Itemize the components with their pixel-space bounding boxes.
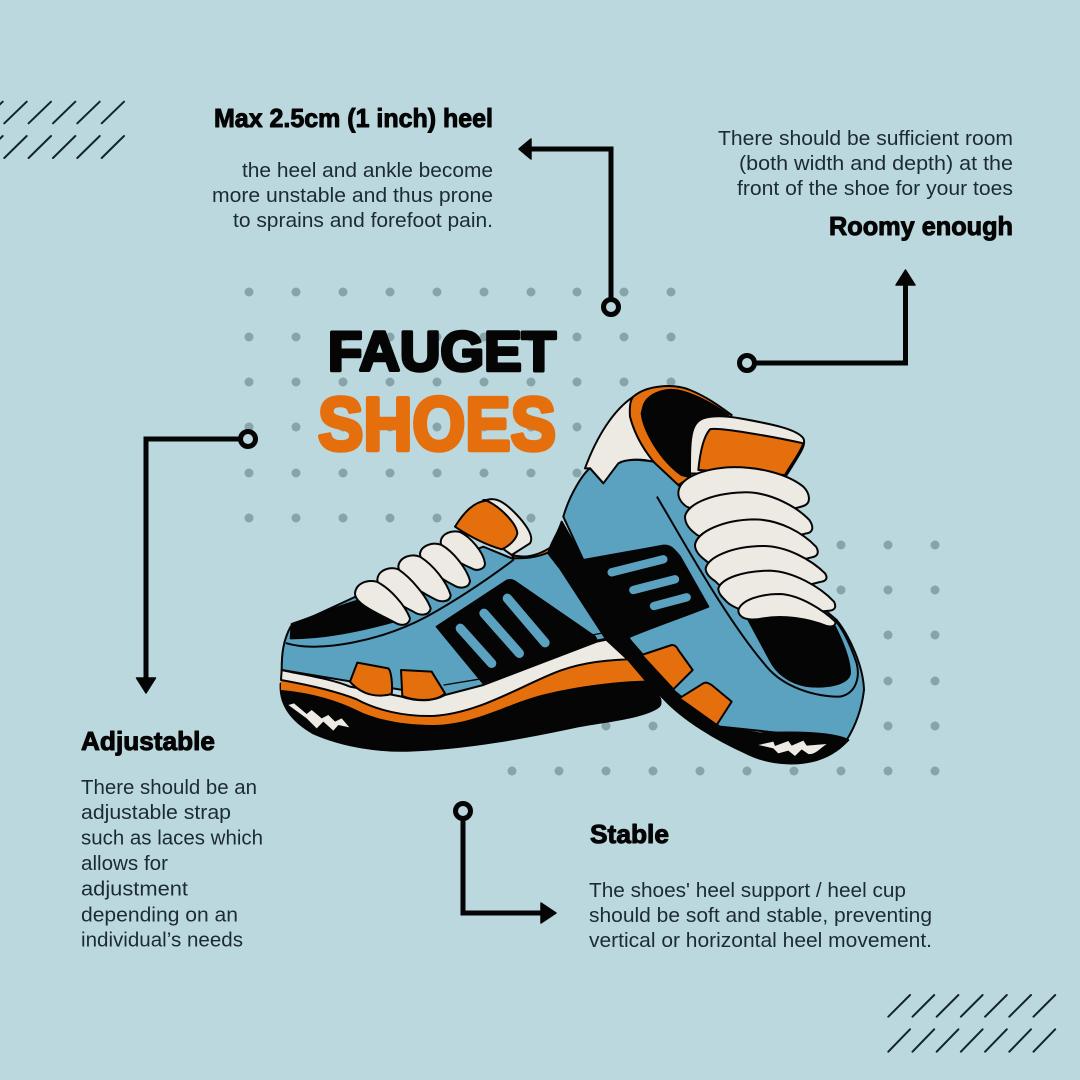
text block: roomy enough: Roomy enough: [829, 211, 1013, 241]
text block: heel: Max 2.5cm (1 inch) heel: [214, 103, 493, 133]
text block: roomy enough: (both width and depth) at the: [739, 153, 1013, 175]
text block: roomy enough: front of the shoe for your toes: [737, 178, 1013, 200]
text block: stable: The shoes' heel support / heel cup: [589, 880, 906, 902]
hatch pattern: bottom right: [888, 995, 1055, 1052]
hatch pattern: top left: [0, 102, 124, 158]
text block: stable: vertical or horizontal heel movement.: [589, 930, 932, 952]
text block: adjustable: depending on an: [81, 904, 238, 926]
text block: adjustable: Adjustable: [81, 726, 215, 756]
text block: heel: more unstable and thus prone: [212, 185, 493, 207]
text block: stable: should be soft and stable, preventing: [589, 905, 932, 927]
arrow: roomy: [740, 270, 915, 370]
text block: adjustable: such as laces which: [81, 828, 263, 850]
text block: heel: [212, 103, 493, 232]
text block: heel: to sprains and forefoot pain.: [233, 210, 493, 232]
text block: roomy enough: There should be sufficient room: [718, 128, 1013, 150]
text block: adjustable: [81, 726, 263, 952]
dot grid: lower: [508, 540, 940, 776]
title: [318, 320, 556, 466]
text block: stable: [589, 819, 932, 952]
text block: adjustable: There should be an: [81, 777, 257, 799]
text block: roomy enough: [718, 128, 1013, 241]
text block: heel: the heel and ankle become: [242, 160, 493, 182]
illustration: left shoe: [281, 499, 661, 751]
dot grid: upper: [244, 288, 676, 522]
text block: adjustable: adjustment: [81, 878, 188, 900]
text block: adjustable: individual’s needs: [81, 930, 243, 952]
arrow: heel: [519, 139, 618, 314]
arrow: adjustable: [136, 432, 256, 693]
title: SHOES: [318, 382, 556, 466]
title: FAUGET: [328, 320, 556, 382]
text block: adjustable: adjustable strap: [81, 802, 231, 824]
text block: adjustable: allows for: [81, 853, 168, 875]
text block: stable: Stable: [590, 819, 669, 849]
arrow: stable: [456, 804, 556, 923]
illustration: right shoe: [548, 386, 864, 763]
